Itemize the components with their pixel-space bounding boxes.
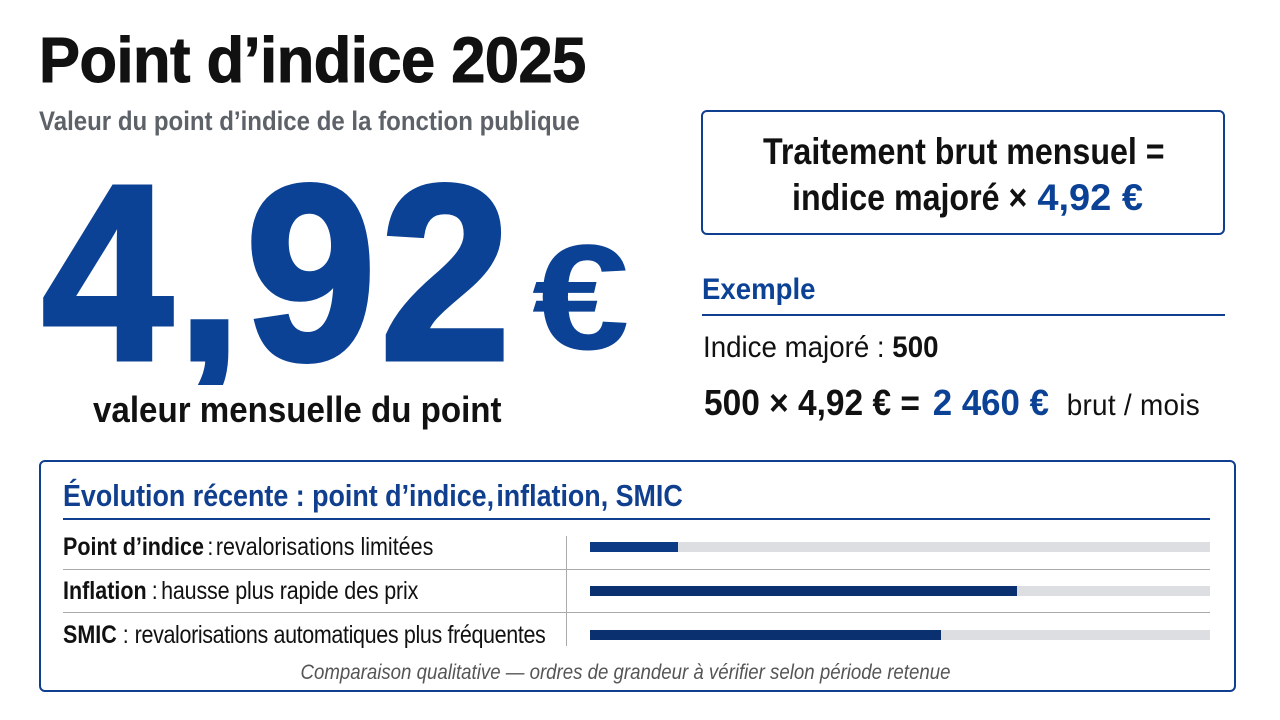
example calculation: 500 × 4,92 € = brut / mois	[704, 382, 1200, 423]
example index: Indice majoré : 500	[703, 331, 939, 364]
big value 4,92: 4,92	[42, 133, 514, 412]
title: Point d’indice 2025	[39, 24, 586, 96]
formula line 1: Traitement brut mensuel =	[763, 131, 1165, 172]
example heading: Exemple	[702, 273, 816, 306]
row: inflation label: Inflation : hausse plus rapide des prix	[63, 577, 418, 605]
formula line 2	[792, 177, 1143, 218]
formula line 2: 4,92 €	[1037, 177, 1143, 218]
subtitle: Valeur du point d’indice de la fonction publique	[39, 106, 580, 136]
formula box	[701, 110, 1225, 235]
euro sign: €	[532, 213, 630, 381]
panel: recent evolution	[39, 460, 1236, 692]
panel heading: Évolution récente : point d’indice, inflation, SMIC	[63, 478, 683, 513]
row: inflation bar	[590, 586, 1210, 596]
example calculation: 2 460 €	[933, 382, 1049, 423]
row: point d'indice label: Point d’indice : revalorisations limitées	[63, 533, 433, 561]
big value caption: valeur mensuelle du point	[93, 389, 502, 430]
formula line 2: indice majoré ×	[792, 177, 1027, 218]
row: point d'indice bar	[590, 542, 1210, 552]
row: SMIC label: SMIC : revalorisations automatiques plus fréquentes	[63, 621, 545, 649]
footnote: Comparaison qualitative — ordres de grandeur à vérifier selon période retenue	[301, 661, 950, 684]
row: SMIC bar	[590, 630, 1210, 640]
